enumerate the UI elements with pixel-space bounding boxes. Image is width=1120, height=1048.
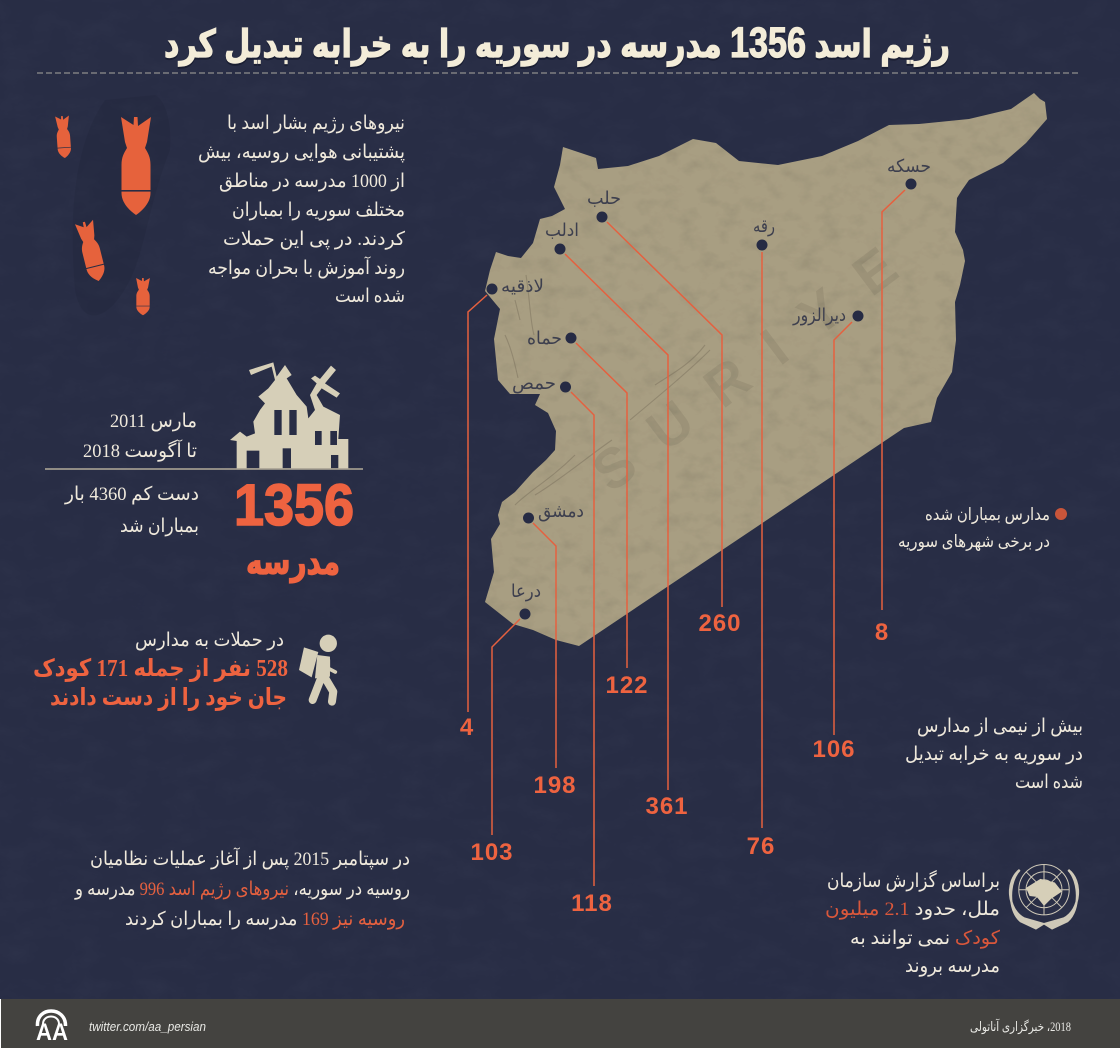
text: half of schools ruined <box>905 716 1083 793</box>
title: رژیم اسد 1356 مدرسه در سوریه را به خرابه تبدیل کرد <box>164 21 950 69</box>
city values: 106 <box>812 736 856 763</box>
city values: 118 <box>571 890 613 917</box>
city labels: درعا <box>511 581 541 601</box>
bombing count text <box>64 484 199 537</box>
city labels <box>501 156 931 601</box>
city values: 103 <box>470 839 514 866</box>
text: half of schools ruined: در سوریه به خرابه تبدیل <box>905 744 1083 765</box>
intro text <box>198 113 406 307</box>
text: half of schools ruined: شده است <box>1015 772 1083 793</box>
bombing count text: بمباران شد <box>120 516 199 537</box>
city labels: حماه <box>527 328 562 348</box>
UN text: براساس گزارش سازمان <box>827 869 1000 892</box>
dates <box>83 411 197 462</box>
UN text: مدرسه بروند <box>905 956 1000 977</box>
icon: child with backpack <box>299 635 337 702</box>
intro text: از 1000 مدرسه در مناطق <box>219 171 405 192</box>
intro text: کردند. در پی این حملات <box>223 229 406 250</box>
casualties text: 528 نفر از جمله 171 کودک <box>33 656 288 682</box>
city values: 8 <box>875 619 889 646</box>
casualties text <box>33 630 288 711</box>
city labels: دمشق <box>538 501 584 522</box>
big number: 1356 schools <box>234 473 354 583</box>
icon: ruined school <box>230 362 348 468</box>
title: رژیم اسد 1356 مدرسه در سوریه را به خرابه تبدیل کرد <box>164 19 950 67</box>
UN text: ملل، حدود 2.1 میلیون <box>825 899 1000 920</box>
legend: در برخی شهرهای سوریه <box>898 532 1050 552</box>
city labels: دیرالزور <box>792 305 846 326</box>
city labels: حسکه <box>887 156 931 176</box>
footer twitter handle: twitter.com/aa_persian <box>89 1020 206 1034</box>
city values: 198 <box>533 772 577 799</box>
UN text: کودک نمی توانند به <box>850 928 1001 949</box>
bomb illustrations <box>55 95 170 315</box>
September 2015 text: روسیه نیز 169 مدرسه را بمباران کردند <box>125 909 405 930</box>
footer <box>0 999 1120 1048</box>
icon: UN emblem <box>1010 864 1078 928</box>
big number: 1356 schools: 1356 <box>234 473 354 538</box>
September 2015 text: در سپتامبر 2015 پس از آغاز عملیات نظامیان <box>90 846 410 870</box>
bombing count text: دست کم 4360 بار <box>64 484 199 505</box>
city labels: حلب <box>587 188 621 208</box>
intro text: مختلف سوریه را بمباران <box>232 200 405 221</box>
city values: 260 <box>698 610 742 637</box>
casualties text: در حملات به مدارس <box>135 630 284 651</box>
text: half of schools ruined: بیش از نیمی از مدارس <box>917 716 1083 737</box>
intro text: نیروهای رژیم بشار اسد با <box>227 113 405 134</box>
city labels: رقه <box>753 216 775 236</box>
September 2015 text <box>74 846 410 930</box>
intro text: پشتیبانی هوایی روسیه، بیش <box>198 142 405 163</box>
legend: مدارس بمباران شده <box>925 505 1050 524</box>
city labels: ادلب <box>545 220 579 240</box>
city values: 4 <box>460 714 474 741</box>
city labels: لاذقیه <box>501 276 544 296</box>
legend <box>898 505 1067 552</box>
divider <box>45 468 363 470</box>
intro text: روند آموزش با بحران مواجه <box>208 255 405 279</box>
logo: Anadolu Agency: AA <box>36 1019 68 1046</box>
city labels: حمص <box>512 373 556 394</box>
September 2015 text: روسیه در سوریه، نیروهای رژیم اسد 996 مدرسه و <box>74 879 410 900</box>
dates: مارس 2011 <box>110 411 197 432</box>
city values <box>460 610 889 917</box>
intro text: شده است <box>335 286 405 307</box>
city values: 361 <box>645 793 689 820</box>
watermark: SURIYE: SURIYE <box>580 216 933 504</box>
city values: 122 <box>605 672 649 699</box>
city dots <box>486 178 916 620</box>
UN text <box>825 869 1001 977</box>
dates: تا آگوست 2018 <box>83 438 197 462</box>
casualties text: جان خود را از دست دادند <box>50 685 287 711</box>
big number: 1356 schools: مدرسه <box>246 542 340 583</box>
map of Syria <box>485 93 1047 646</box>
city values: 76 <box>747 833 775 860</box>
footer credit: 2018، خبرگزاری آناتولی <box>970 1018 1071 1035</box>
connector lines <box>468 190 905 886</box>
